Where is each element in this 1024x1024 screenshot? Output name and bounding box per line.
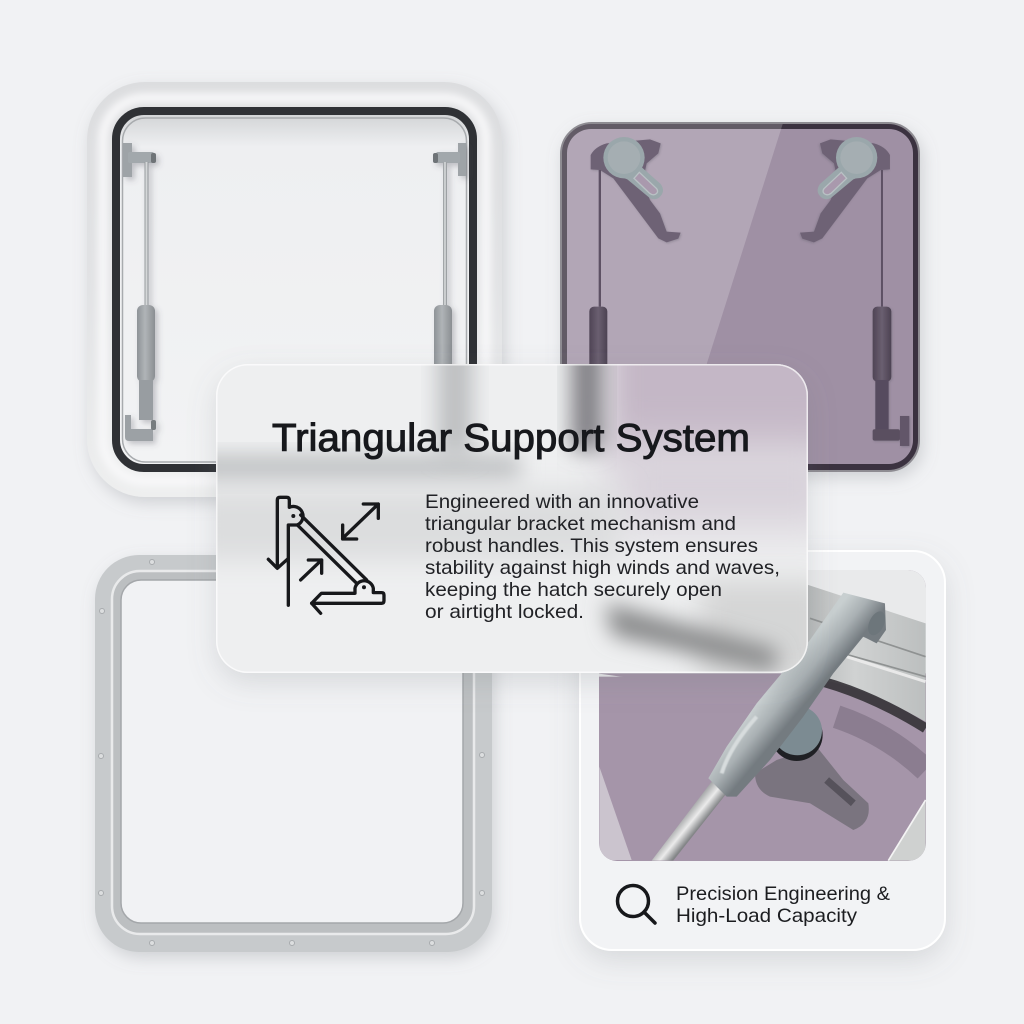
- caption: Precision Engineering &: [676, 883, 890, 905]
- description: keeping the hatch securely open: [425, 579, 722, 601]
- description: Engineered with an innovative: [425, 491, 699, 513]
- white hatch frame with struts: [87, 82, 502, 497]
- detail card: [580, 551, 945, 950]
- title: Triangular Support System: [272, 417, 750, 460]
- caption: High-Load Capacity: [676, 905, 857, 927]
- icon: triangular bracket: [268, 497, 384, 613]
- left latch: [589, 137, 681, 370]
- right strut: [433, 143, 466, 375]
- magnifier icon: [618, 886, 655, 923]
- right handle: [873, 307, 909, 446]
- description: triangular bracket mechanism and: [425, 513, 736, 535]
- description: robust handles. This system ensures: [425, 535, 758, 557]
- description: [425, 491, 780, 623]
- description: or airtight locked.: [425, 601, 584, 623]
- frosted main card: [209, 364, 816, 691]
- aluminium mounting frame: [95, 555, 492, 952]
- left strut: [123, 143, 156, 441]
- rod: [652, 782, 727, 861]
- screws: [98, 560, 484, 946]
- purple glass hatch: [561, 123, 919, 480]
- frosted blur of objects behind: [216, 364, 808, 673]
- detail photo: [597, 567, 930, 861]
- latch seen through glass: [755, 747, 869, 830]
- right latch: [800, 137, 890, 307]
- caption: [676, 883, 890, 927]
- description: stability against high winds and waves,: [425, 557, 780, 579]
- handle: [708, 593, 886, 797]
- glass reflection: [562, 124, 782, 364]
